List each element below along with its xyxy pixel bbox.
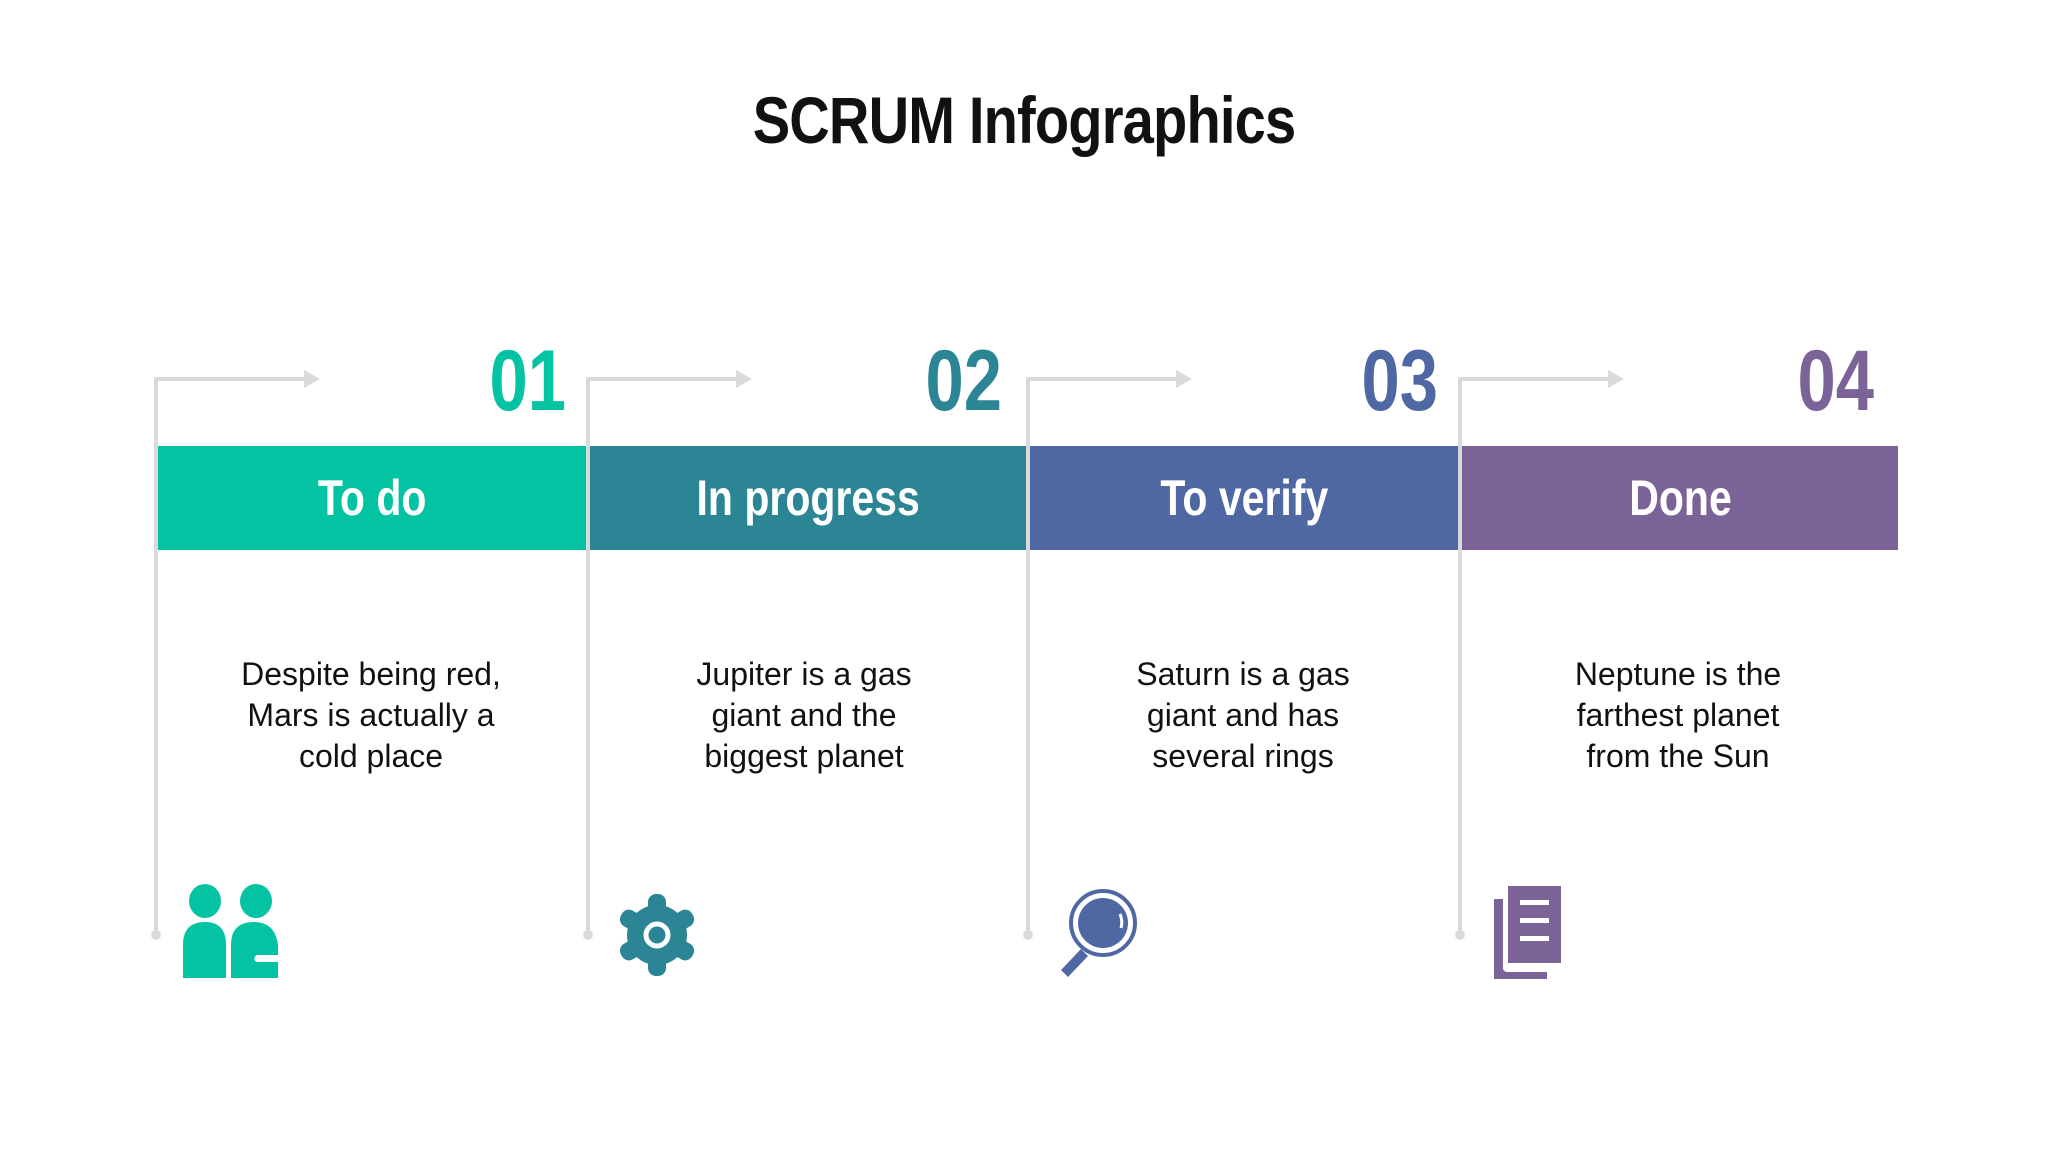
icon: people — [183, 884, 278, 978]
bar: To do — [158, 446, 586, 550]
text: done: from the Sun — [1586, 738, 1770, 774]
icon: documents — [1494, 886, 1561, 979]
icon: gear — [620, 894, 694, 976]
text: in progress — [696, 656, 912, 774]
icon: magnifier — [1061, 889, 1137, 977]
number 04: 04 — [1797, 333, 1874, 429]
title: SCRUM Infographics — [753, 83, 1295, 157]
text: to verify: giant and has — [1147, 697, 1339, 733]
text: to do: Mars is actually a — [247, 697, 495, 733]
text: to verify: several rings — [1152, 738, 1334, 774]
bar: In progress: In progress — [696, 470, 920, 526]
text: done: Neptune is the — [1575, 656, 1781, 692]
bar: To do: To do — [318, 470, 426, 526]
text: done: farthest planet — [1577, 697, 1779, 733]
text: done — [1575, 656, 1781, 774]
text: to do: Despite being red, — [241, 656, 501, 692]
bar: To verify — [1030, 446, 1458, 550]
number 03: 03 — [1361, 333, 1438, 429]
number 01: 01 — [489, 333, 566, 429]
text: in progress: giant and the — [711, 697, 897, 733]
bar: Done: Done — [1629, 470, 1731, 526]
text: in progress: Jupiter is a gas — [696, 656, 912, 692]
text: to do: cold place — [299, 738, 443, 774]
text: to do — [241, 656, 501, 774]
number 02: 02 — [925, 333, 1002, 429]
text: to verify: Saturn is a gas — [1136, 656, 1350, 692]
bar: To verify: To verify — [1160, 470, 1328, 526]
text: to verify — [1136, 656, 1350, 774]
text: in progress: biggest planet — [704, 738, 904, 774]
bar: Done — [1462, 446, 1898, 550]
bar: In progress — [590, 446, 1026, 550]
